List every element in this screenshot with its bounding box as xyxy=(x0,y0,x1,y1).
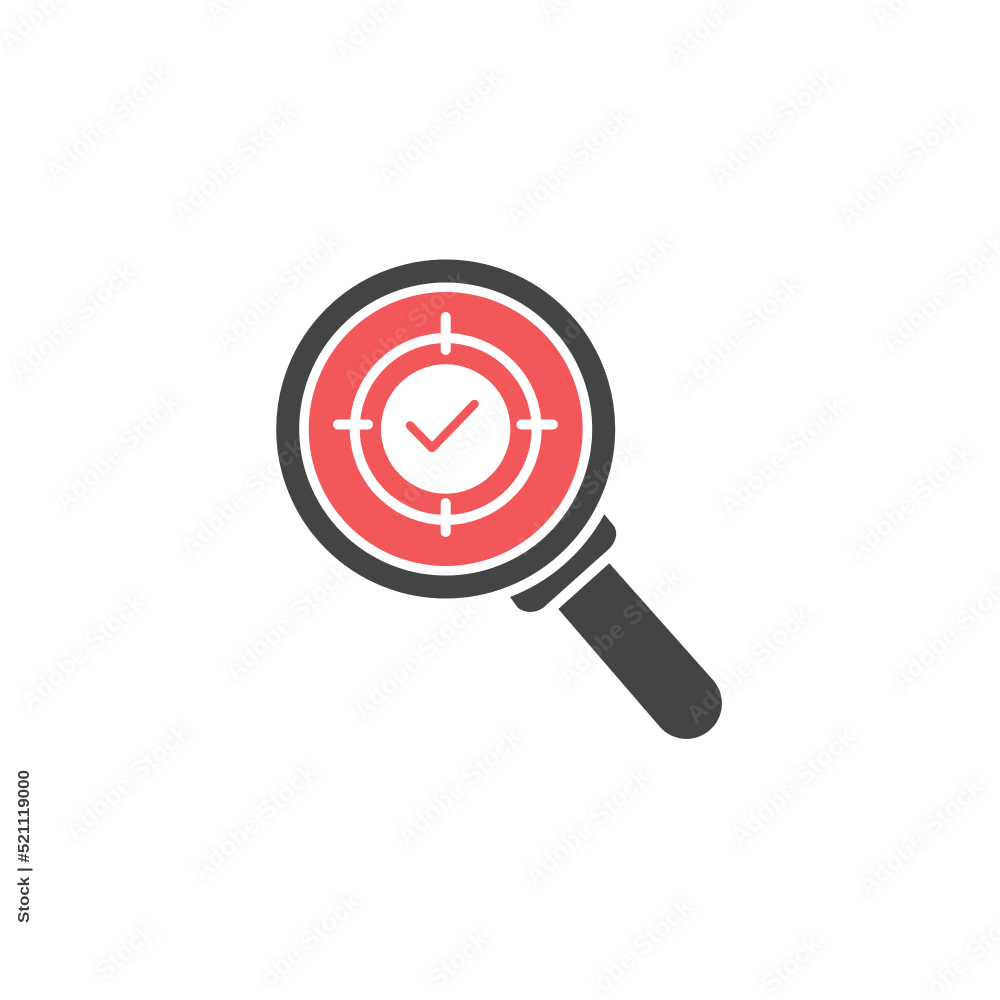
watermark pattern: Adobe Stock xyxy=(337,264,474,395)
watermark pattern: Adobe Stock xyxy=(49,386,186,517)
watermark pattern: Adobe Stock xyxy=(14,586,151,717)
watermark pattern: Adobe Stock xyxy=(704,61,841,192)
watermark pattern: Stock xyxy=(755,928,827,999)
watermark pattern: Adobe Stock xyxy=(832,101,969,232)
watermark pattern: Adobe Stock xyxy=(519,761,656,892)
watermark pattern: obe Stock xyxy=(587,891,699,998)
handle grip xyxy=(558,563,722,739)
watermark pattern: Adobe Stock xyxy=(347,594,484,725)
watermark pattern: Adobe Stock xyxy=(552,561,689,692)
icon: check mark xyxy=(410,404,474,448)
watermark pattern: Adobe Stock xyxy=(174,431,311,562)
watermark pattern: Adobe Stock xyxy=(670,269,807,400)
watermark pattern: Adobe Stock xyxy=(166,96,303,227)
stock id text: Stock | #521119000 xyxy=(16,770,33,923)
watermark pattern: Adobe Stock xyxy=(371,61,508,192)
handle collar xyxy=(510,514,616,612)
target reticle xyxy=(338,317,553,532)
watermark pattern: Adobe Stock xyxy=(209,226,346,357)
watermark pattern: Adobe Stock xyxy=(4,256,141,387)
watermark pattern: Adobe Stock xyxy=(509,431,646,562)
watermark pattern: Adobe Stock xyxy=(186,756,323,887)
lens red fill xyxy=(309,292,583,566)
watermark pattern: Adobe Stock xyxy=(680,599,817,730)
watermark pattern: Adobe Stock xyxy=(842,436,979,567)
watermark pattern: obe Stock xyxy=(254,886,366,993)
watermark pattern: Adobe Stock xyxy=(714,391,851,522)
watermark pattern: Adobe Stock xyxy=(724,721,861,852)
watermark pattern: Adobe Stock xyxy=(59,716,196,847)
icon: magnifying glass xyxy=(288,271,722,739)
watermark pattern xyxy=(279,272,722,724)
watermark pattern: Stock xyxy=(422,923,494,994)
watermark pattern: Adobe Stock xyxy=(219,556,356,687)
watermark pattern: Adobe Stock xyxy=(852,771,989,902)
watermark pattern: Adobe Stock xyxy=(39,56,176,187)
watermark pattern: Adobe Stock xyxy=(542,228,679,359)
watermark pattern: Adobe Stock xyxy=(381,391,518,522)
watermark pattern: Adobe Stock xyxy=(499,101,636,232)
lens ring xyxy=(288,271,604,587)
watermark pattern: Adobe Stock xyxy=(391,721,528,852)
watermark pattern: Stock xyxy=(89,915,161,986)
